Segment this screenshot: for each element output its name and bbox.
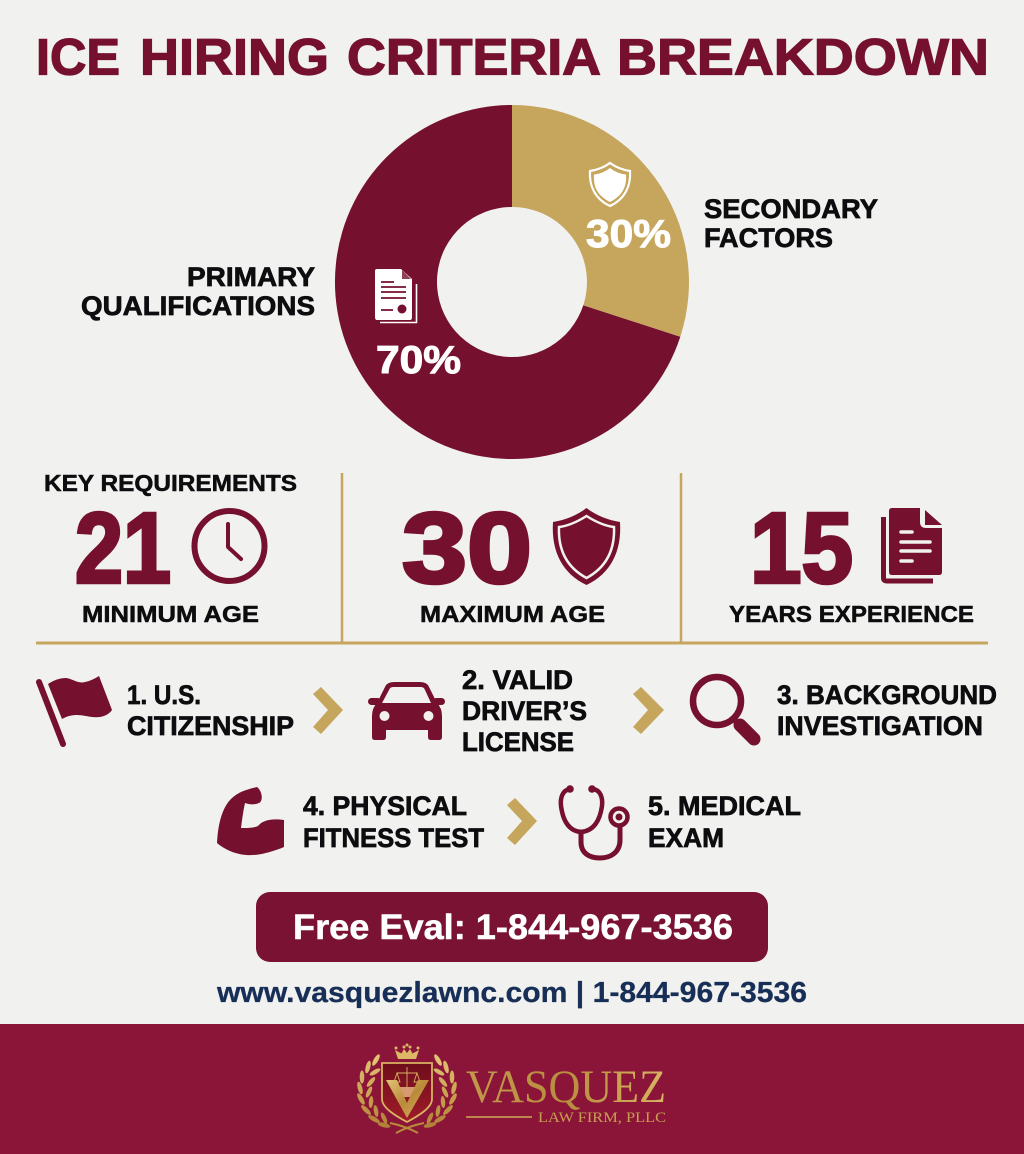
label: 70%: 70% [376,339,461,382]
logo wordmark: LAW FIRM, PLLC [538,1110,666,1126]
call-to-action button: Free Eval: 1-844-967-3536 [293,908,733,947]
slice: primary qualifications 70% [335,105,680,459]
crown [394,1044,420,1059]
donut chart [335,105,689,459]
label: 30%: 30% [586,213,671,256]
icon: clock [194,511,264,581]
title: CRITERIA [347,28,601,86]
V monogram [386,1080,429,1118]
heading: key requirements: KEY REQUIREMENTS [44,470,297,496]
text: step 3 [777,680,997,741]
stat: 15: 15 [750,492,853,604]
step 5: medical exam [561,785,801,858]
step 3: background investigation [693,677,997,741]
icon: documents [884,508,942,581]
logo emblem [356,1044,458,1133]
text: step 5: EXAM [648,823,724,853]
title [36,28,989,86]
label: secondary factors: SECONDARY [704,194,878,224]
step 2: valid driver's license [368,665,587,757]
crossed stems [390,1123,424,1133]
label: primary qualifications [81,262,315,321]
title: HIRING [140,28,329,86]
arrow: chevron 1 [313,687,343,734]
panel: key requirements [36,470,988,643]
icon: car [368,682,445,740]
slice: secondary factors 30% [512,105,689,337]
text: step 4: FITNESS TEST [303,823,484,853]
arrow: chevron 2 [633,687,664,734]
icon: white document [375,269,416,322]
footer band [0,1024,1024,1154]
text: step 5: 5. MEDICAL [648,791,801,821]
step 1: U.S. citizenship [39,676,294,744]
title: ICE [36,28,120,86]
icon: shield [553,508,620,585]
label: primary qualifications: QUALIFICATIONS [81,291,315,321]
text: step 2 [462,665,587,757]
icon: flexed arm [217,787,284,855]
left branch [356,1053,391,1129]
website and phone: www.vasquezlawnc.com | 1-844-967-3536 [216,977,807,1009]
label: maximum age: MAXIMUM AGE [420,601,605,627]
icon: flag [39,676,112,744]
text: step 1 [127,680,294,741]
text: step 3: 3. BACKGROUND [777,680,997,710]
scales [394,1067,420,1090]
arrow: chevron 3 [507,798,537,845]
wreath [356,1053,458,1129]
text: step 5 [648,791,801,853]
text: step 2: LICENSE [462,727,574,757]
text: step 4 [303,791,484,853]
icon: white shield [590,163,630,206]
label: minimum age: MINIMUM AGE [82,601,259,627]
stat: 21: 21 [75,492,171,604]
text: step 1: CITIZENSHIP [127,711,294,741]
right branch [423,1053,458,1129]
title: BREAKDOWN [617,28,989,86]
text: step 4: 4. PHYSICAL [303,791,467,821]
label: secondary factors: FACTORS [704,223,833,253]
logo wordmark: VASQUEZ [466,1061,666,1113]
text: step 1: 1. U.S. [127,680,201,710]
shield [382,1063,432,1122]
text: step 2: DRIVER’S [462,696,587,726]
call-to-action button [256,892,768,962]
icon: stethoscope [561,785,628,858]
text: step 2: 2. VALID [462,665,573,695]
stat: 30: 30 [402,492,532,604]
icon: magnifier [693,677,754,739]
label: secondary factors [704,194,878,253]
label: years experience: YEARS EXPERIENCE [729,601,974,627]
text: step 3: INVESTIGATION [777,711,983,741]
label: primary qualifications: PRIMARY [187,262,315,292]
step 4: physical fitness test [217,787,484,855]
